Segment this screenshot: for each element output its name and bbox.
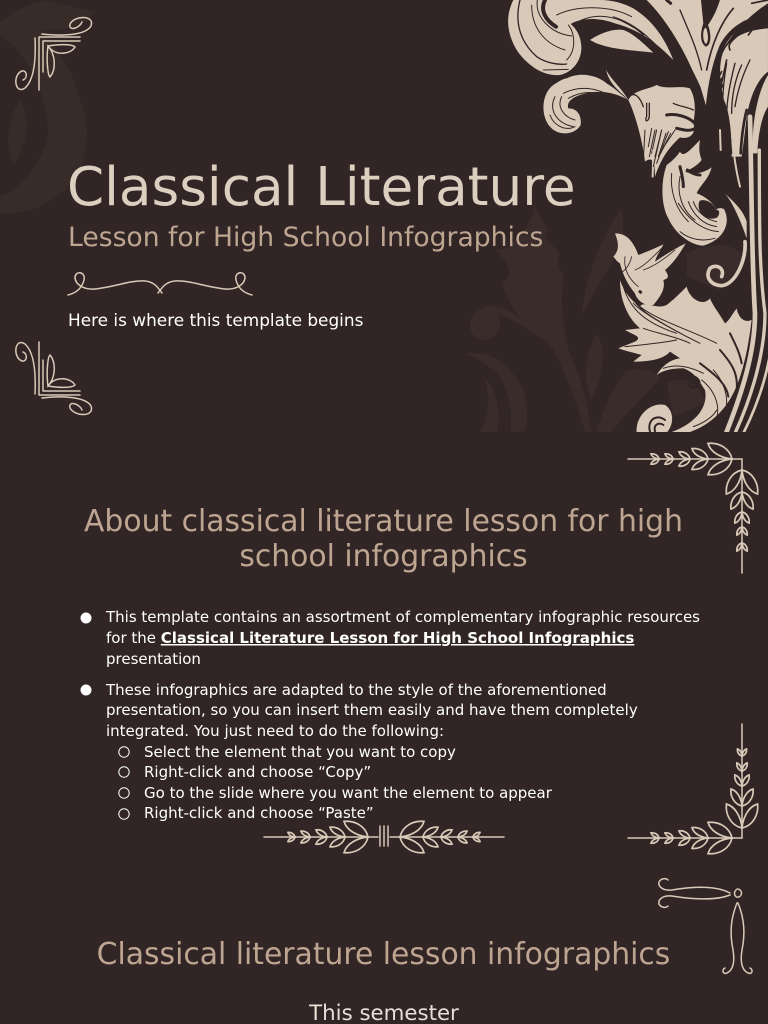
flourish divider [68, 273, 252, 295]
sprig divider center [264, 821, 504, 853]
section heading: about: About classical literature lesson for high [84, 504, 683, 539]
corner ornament bottom left [16, 342, 92, 415]
intro text: Here is where this template begins [68, 310, 363, 330]
bullet list: presentation, so you can insert them easily and have them completely [106, 701, 638, 719]
upper scrolls and leaves [508, 0, 768, 177]
bullet list: Go to the slide where you want the element to appear [144, 784, 553, 802]
lower leaves and stems [613, 117, 768, 433]
faint floral top left [0, 0, 95, 214]
flourish corner lower right [659, 879, 752, 973]
bullet list: Right-click and choose “Paste” [144, 804, 374, 822]
sprig corner top right [628, 443, 758, 573]
bullet list: presentation [106, 650, 201, 668]
faint floral behind ornament [465, 203, 743, 433]
bullet list: Select the element that you want to copy [144, 743, 456, 761]
section heading: infographics: Classical literature lesson infographics [97, 937, 670, 972]
bullet list: for the Classical Literature Lesson for High School Infographics [106, 629, 634, 647]
title: Classical Literature [67, 156, 576, 218]
bullet list: These infographics are adapted to the style of the aforementioned [105, 681, 607, 699]
corner ornament top left [16, 17, 92, 90]
section heading: about second line: school infographics [239, 539, 528, 574]
subtitle: Lesson for High School Infographics [68, 222, 543, 253]
bullet list: Right-click and choose “Copy” [144, 763, 371, 781]
sprig corner bottom right [628, 724, 758, 854]
decorative acanthus ornament [508, 0, 768, 433]
bullet list: This template contains an assortment of complementary infographic resources [105, 608, 700, 626]
bullet list [80, 608, 700, 822]
bullet list: integrated. You just need to do the following: [106, 722, 444, 740]
